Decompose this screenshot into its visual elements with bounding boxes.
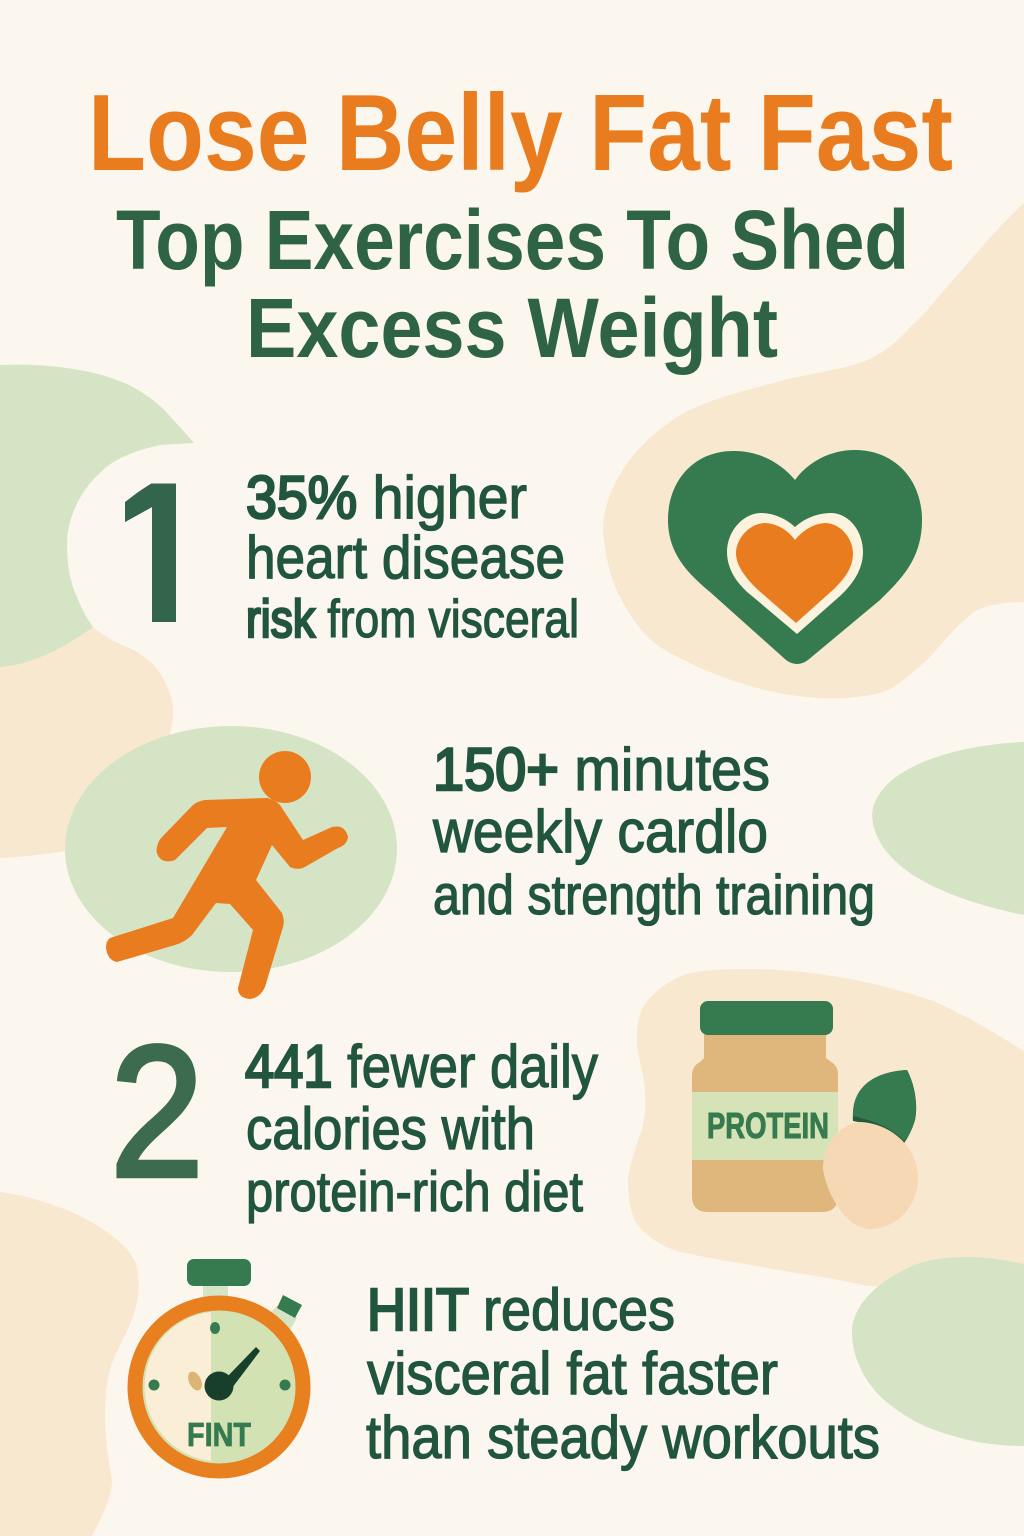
subtitle [116, 193, 909, 375]
icon: heart [668, 450, 922, 664]
text: hiit: than steady workouts [366, 1404, 880, 1471]
text: protein: 441 fewer daily [245, 1033, 598, 1100]
text: protein: calories with [246, 1096, 535, 1162]
text: cardio: and strength training [433, 863, 875, 926]
number 2: 2 [110, 1007, 204, 1216]
subtitle: Top Exercises To Shed [116, 193, 909, 287]
icon: protein jar and fruit: PROTEIN [707, 1105, 829, 1146]
text: cardio [432, 736, 875, 926]
text: protein: protein-rich diet [246, 1160, 583, 1224]
text: hiit: HIIT reduces [367, 1277, 675, 1343]
text: hiit: visceral fat faster [367, 1340, 778, 1407]
text: heart disease risk: 35% higher [246, 464, 527, 531]
text: cardio: weekly cardlo [432, 798, 768, 865]
number 1: 1 [106, 447, 214, 664]
text: heart disease risk [246, 464, 579, 649]
text: heart disease risk: risk from visceral [246, 590, 579, 649]
text: hiit [366, 1277, 880, 1471]
icon: stopwatch [135, 1259, 303, 1471]
text: heart disease risk: heart disease [246, 524, 565, 591]
icon: protein jar and fruit [692, 1001, 918, 1229]
subtitle: Excess Weight [246, 281, 778, 375]
icon: runner [65, 726, 397, 999]
icon: stopwatch: FINT [187, 1416, 251, 1453]
text: protein [245, 1033, 598, 1224]
text: cardio: 150+ minutes [433, 736, 770, 803]
